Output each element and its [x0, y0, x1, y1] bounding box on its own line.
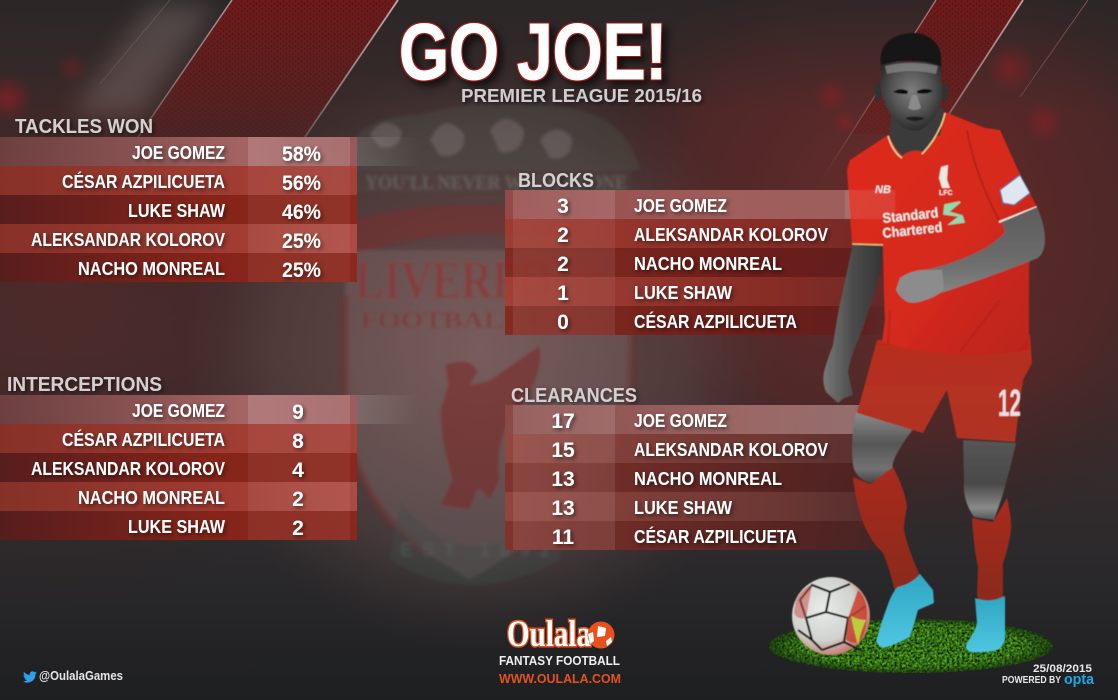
row: Luke Shaw 46%	[0, 195, 357, 224]
heading: tackles won: TACKLES WON	[15, 115, 153, 138]
website: WWW.OULALA.COM	[499, 671, 621, 686]
row: 17 Joe Gomez: 17	[551, 410, 575, 433]
row: 2 Nacho Monreal: 2	[557, 253, 569, 276]
tagline: FANTASY FOOTBALL	[499, 653, 620, 668]
row: 17 Joe Gomez	[505, 405, 900, 434]
row: Aleksandar Kolorov 25%	[0, 224, 357, 253]
row: Nacho Monreal 2: NACHO MONREAL	[78, 487, 225, 508]
right forearm and fist	[896, 207, 1045, 303]
row: César Azpilicueta 8: CÉSAR AZPILICUETA	[62, 429, 225, 450]
right sock	[972, 498, 1011, 605]
diagonal stripe: left	[70, 0, 398, 137]
player: Joe Gomez	[823, 33, 1045, 652]
row: Joe Gomez 58%	[0, 137, 420, 166]
jersey	[847, 112, 1037, 354]
row: 13 Luke Shaw: LUKE SHAW	[634, 497, 732, 518]
row: Aleksandar Kolorov 25%: ALEKSANDAR KOLOROV	[31, 229, 226, 250]
crest watermark: Liverpool FC	[340, 103, 640, 585]
powered by: POWERED BY	[1002, 675, 1061, 686]
twitter handle	[23, 669, 123, 683]
ears	[874, 83, 948, 101]
shorts number: 12	[998, 383, 1021, 425]
row: César Azpilicueta 56%	[0, 166, 357, 195]
panel: tackles won	[0, 115, 420, 282]
row: Joe Gomez 58%: JOE GOMEZ	[132, 142, 225, 163]
row: 13 Luke Shaw	[505, 492, 900, 521]
row: 13 Nacho Monreal: 13	[551, 468, 575, 491]
row: 1 Luke Shaw: 1	[557, 282, 569, 305]
row: 2 Nacho Monreal	[505, 248, 890, 277]
heading: clearances: CLEARANCES	[511, 384, 637, 407]
row: 15 Aleksandar Kolorov: ALEKSANDAR KOLOROV	[634, 439, 829, 460]
club badge: LFC	[939, 190, 953, 197]
date: 25/08/2015	[1033, 663, 1092, 675]
row: César Azpilicueta 8: 8	[292, 430, 304, 453]
sponsor text: Standard	[882, 204, 939, 226]
panel: clearances	[505, 384, 900, 550]
row: 2 Aleksandar Kolorov: ALEKSANDAR KOLOROV	[634, 224, 829, 245]
right boot	[966, 596, 1005, 652]
neck	[889, 108, 945, 156]
row: Joe Gomez 9: JOE GOMEZ	[132, 400, 225, 421]
diagonal stripe: right	[832, 0, 1088, 164]
shorts	[857, 335, 1032, 442]
row: Luke Shaw 46%: LUKE SHAW	[128, 200, 225, 221]
row: 13 Nacho Monreal	[505, 463, 900, 492]
club badge	[939, 165, 953, 197]
heading: blocks: BLOCKS	[518, 169, 594, 192]
row: Joe Gomez 9	[0, 395, 420, 424]
row: 11 César Azpilicueta: 11	[552, 526, 574, 549]
icon: twitter bird	[23, 671, 37, 683]
league sleeve badge	[1000, 175, 1030, 205]
row: Aleksandar Kolorov 4: ALEKSANDAR KOLOROV	[31, 458, 226, 479]
row: Aleksandar Kolorov 4: 4	[292, 459, 304, 482]
row: 1 Luke Shaw	[505, 277, 890, 306]
row: 13 Nacho Monreal: NACHO MONREAL	[634, 468, 782, 489]
crest watermark: Liverpool FC: LIVERPOOL	[355, 250, 615, 310]
football	[792, 577, 870, 655]
row: 0 César Azpilicueta	[505, 306, 890, 335]
crest watermark: Liverpool FC: FOOTBALL CLUB	[360, 308, 610, 334]
row: 2 Aleksandar Kolorov	[505, 219, 890, 248]
face details	[885, 63, 938, 121]
row: Nacho Monreal 25%	[0, 253, 357, 282]
row: 0 César Azpilicueta: 0	[557, 311, 569, 334]
left arm and hand	[823, 243, 885, 403]
wordmark: Oulala	[507, 614, 591, 655]
row: Joe Gomez 58%: 58%	[282, 143, 321, 166]
sponsor text	[882, 204, 943, 241]
crest watermark: Liverpool FC: YOU'LL NEVER WALK ALONE	[365, 172, 627, 194]
head	[881, 62, 942, 131]
row: 2 Aleksandar Kolorov: 2	[557, 224, 569, 247]
panel: interceptions	[0, 373, 420, 540]
row: Aleksandar Kolorov 4	[0, 453, 357, 482]
credit: date and powered by opta	[1002, 663, 1095, 688]
row: 11 César Azpilicueta	[505, 521, 900, 550]
row: Luke Shaw 2: 2	[292, 517, 304, 540]
logo: Oulala Fantasy Football	[499, 614, 621, 686]
row: César Azpilicueta 8	[0, 424, 357, 453]
crest watermark: Liverpool FC: EST 1892	[400, 540, 550, 560]
row: 11 César Azpilicueta: CÉSAR AZPILICUETA	[634, 526, 797, 547]
left thigh	[852, 412, 915, 483]
row: Luke Shaw 2	[0, 511, 357, 540]
row: César Azpilicueta 56%: CÉSAR AZPILICUETA	[62, 171, 225, 192]
row: Nacho Monreal 25%: NACHO MONREAL	[78, 258, 225, 279]
left boot	[877, 574, 934, 648]
row: Nacho Monreal 2	[0, 482, 357, 511]
row: 3 Joe Gomez: 3	[557, 195, 569, 218]
row: 2 Nacho Monreal: NACHO MONREAL	[634, 253, 782, 274]
row: César Azpilicueta 56%: 56%	[282, 172, 321, 195]
row: 1 Luke Shaw: LUKE SHAW	[634, 282, 732, 303]
row: 15 Aleksandar Kolorov: 15	[551, 439, 575, 462]
row: 15 Aleksandar Kolorov	[505, 434, 900, 463]
sponsor text: Chartered	[882, 219, 943, 241]
row: Nacho Monreal 2: 2	[292, 488, 304, 511]
new balance logo: NB	[875, 184, 891, 196]
row highlight over player	[845, 190, 895, 219]
panel: blocks	[505, 169, 890, 335]
row: Luke Shaw 46%: 46%	[282, 201, 321, 224]
row: 13 Luke Shaw: 13	[551, 497, 575, 520]
row: Nacho Monreal 25%: 25%	[282, 259, 321, 282]
subtitle: PREMIER LEAGUE 2015/16	[461, 86, 702, 106]
right thigh	[963, 440, 1016, 520]
row: Aleksandar Kolorov 25%: 25%	[282, 230, 321, 253]
heading: interceptions: INTERCEPTIONS	[7, 373, 162, 396]
left sock	[853, 467, 922, 592]
handle text: @OulalaGames	[39, 669, 123, 683]
row: 17 Joe Gomez: JOE GOMEZ	[634, 410, 727, 431]
title: GO JOE!	[399, 7, 667, 96]
row: 3 Joe Gomez	[505, 190, 890, 219]
sponsor logo	[944, 202, 964, 224]
logo football	[588, 622, 614, 648]
row: 3 Joe Gomez: JOE GOMEZ	[634, 195, 727, 216]
hair	[881, 33, 941, 66]
grass patch	[769, 619, 1053, 673]
row: Joe Gomez 9: 9	[292, 401, 304, 424]
row: Luke Shaw 2: LUKE SHAW	[128, 516, 225, 537]
row: 0 César Azpilicueta: CÉSAR AZPILICUETA	[634, 311, 797, 332]
opta logo: opta	[1064, 671, 1095, 688]
